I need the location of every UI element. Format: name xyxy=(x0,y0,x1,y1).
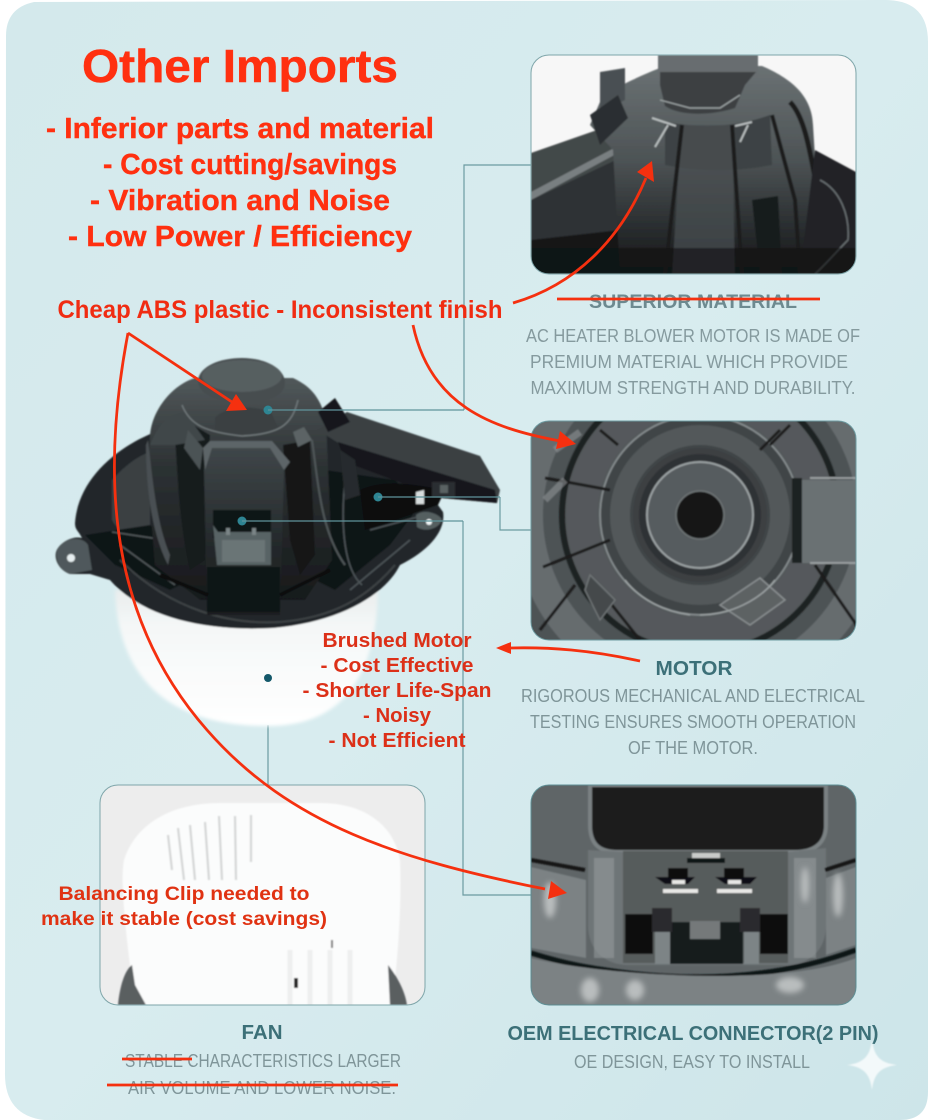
text: fan description xyxy=(125,1051,401,1098)
blower motor main product image xyxy=(56,358,500,726)
callout: balancing clip: Balancing Clip needed to xyxy=(58,884,310,905)
connector lines xyxy=(268,165,531,895)
motor housing xyxy=(148,378,332,600)
text: connector description: OE DESIGN, EASY TO INSTALL xyxy=(574,1052,810,1072)
mounting ears xyxy=(56,539,92,574)
list: import drawbacks xyxy=(46,113,434,253)
callout: brushed motor: - Noisy xyxy=(363,705,432,727)
list: import drawbacks: - Low Power / Efficiency xyxy=(68,221,412,253)
text: motor description: RIGOROUS MECHANICAL AND ELECTRICAL xyxy=(521,686,865,706)
callout: brushed motor: - Shorter Life-Span xyxy=(302,680,492,702)
callout: brushed motor: Brushed Motor xyxy=(322,630,472,652)
list: import drawbacks: - Vibration and Noise xyxy=(90,185,390,217)
heading: motor: MOTOR xyxy=(656,658,733,680)
red annotation arrows xyxy=(107,178,820,1085)
text: motor description: TESTING ENSURES SMOOTH OPERATION xyxy=(530,712,856,732)
text: material description xyxy=(526,326,860,398)
detail panel: connector xyxy=(531,785,856,1005)
text: material description: MAXIMUM STRENGTH AND DURABILITY. xyxy=(530,378,856,398)
detail panel: material xyxy=(531,55,856,274)
mounting flange xyxy=(56,410,443,629)
title: Other Imports xyxy=(82,40,398,92)
flange ribs xyxy=(112,452,150,537)
control module xyxy=(318,412,500,503)
callout: cheap plastic: Cheap ABS plastic - Inconsistent finish xyxy=(58,296,502,324)
housing side ribs xyxy=(146,440,170,565)
heading: superior material: SUPERIOR MATERIAL xyxy=(589,292,797,313)
icon: sparkle xyxy=(847,1040,897,1090)
heading: connector: OEM ELECTRICAL CONNECTOR(2 PIN) xyxy=(508,1023,878,1045)
callout: brushed motor: - Not Efficient xyxy=(328,730,466,752)
text: material description: AC HEATER BLOWER MOTOR IS MADE OF xyxy=(526,326,860,346)
list: import drawbacks: - Inferior parts and material xyxy=(46,113,434,145)
detail panel: fan xyxy=(100,785,425,1005)
text: material description: PREMIUM MATERIAL WHICH PROVIDE xyxy=(530,352,848,372)
heading: fan: FAN xyxy=(242,1022,282,1044)
callout: balancing clip: make it stable (cost savings) xyxy=(41,909,327,930)
text: motor description xyxy=(521,686,865,758)
connector tower xyxy=(204,445,284,615)
list: import drawbacks: - Cost cutting/savings xyxy=(103,149,397,181)
callout: brushed motor: - Cost Effective xyxy=(320,655,474,677)
detail panel: motor xyxy=(532,422,856,640)
callout: balancing clip xyxy=(41,884,327,930)
text: fan description: STABLE CHARACTERISTICS LARGER xyxy=(125,1051,401,1071)
motor cap xyxy=(198,358,285,402)
callout dots xyxy=(238,406,382,682)
fan cage xyxy=(115,590,378,726)
callout: brushed motor xyxy=(302,630,492,752)
text: motor description: OF THE MOTOR. xyxy=(628,738,758,758)
text: fan description: AIR VOLUME AND LOWER NOISE. xyxy=(128,1078,396,1098)
